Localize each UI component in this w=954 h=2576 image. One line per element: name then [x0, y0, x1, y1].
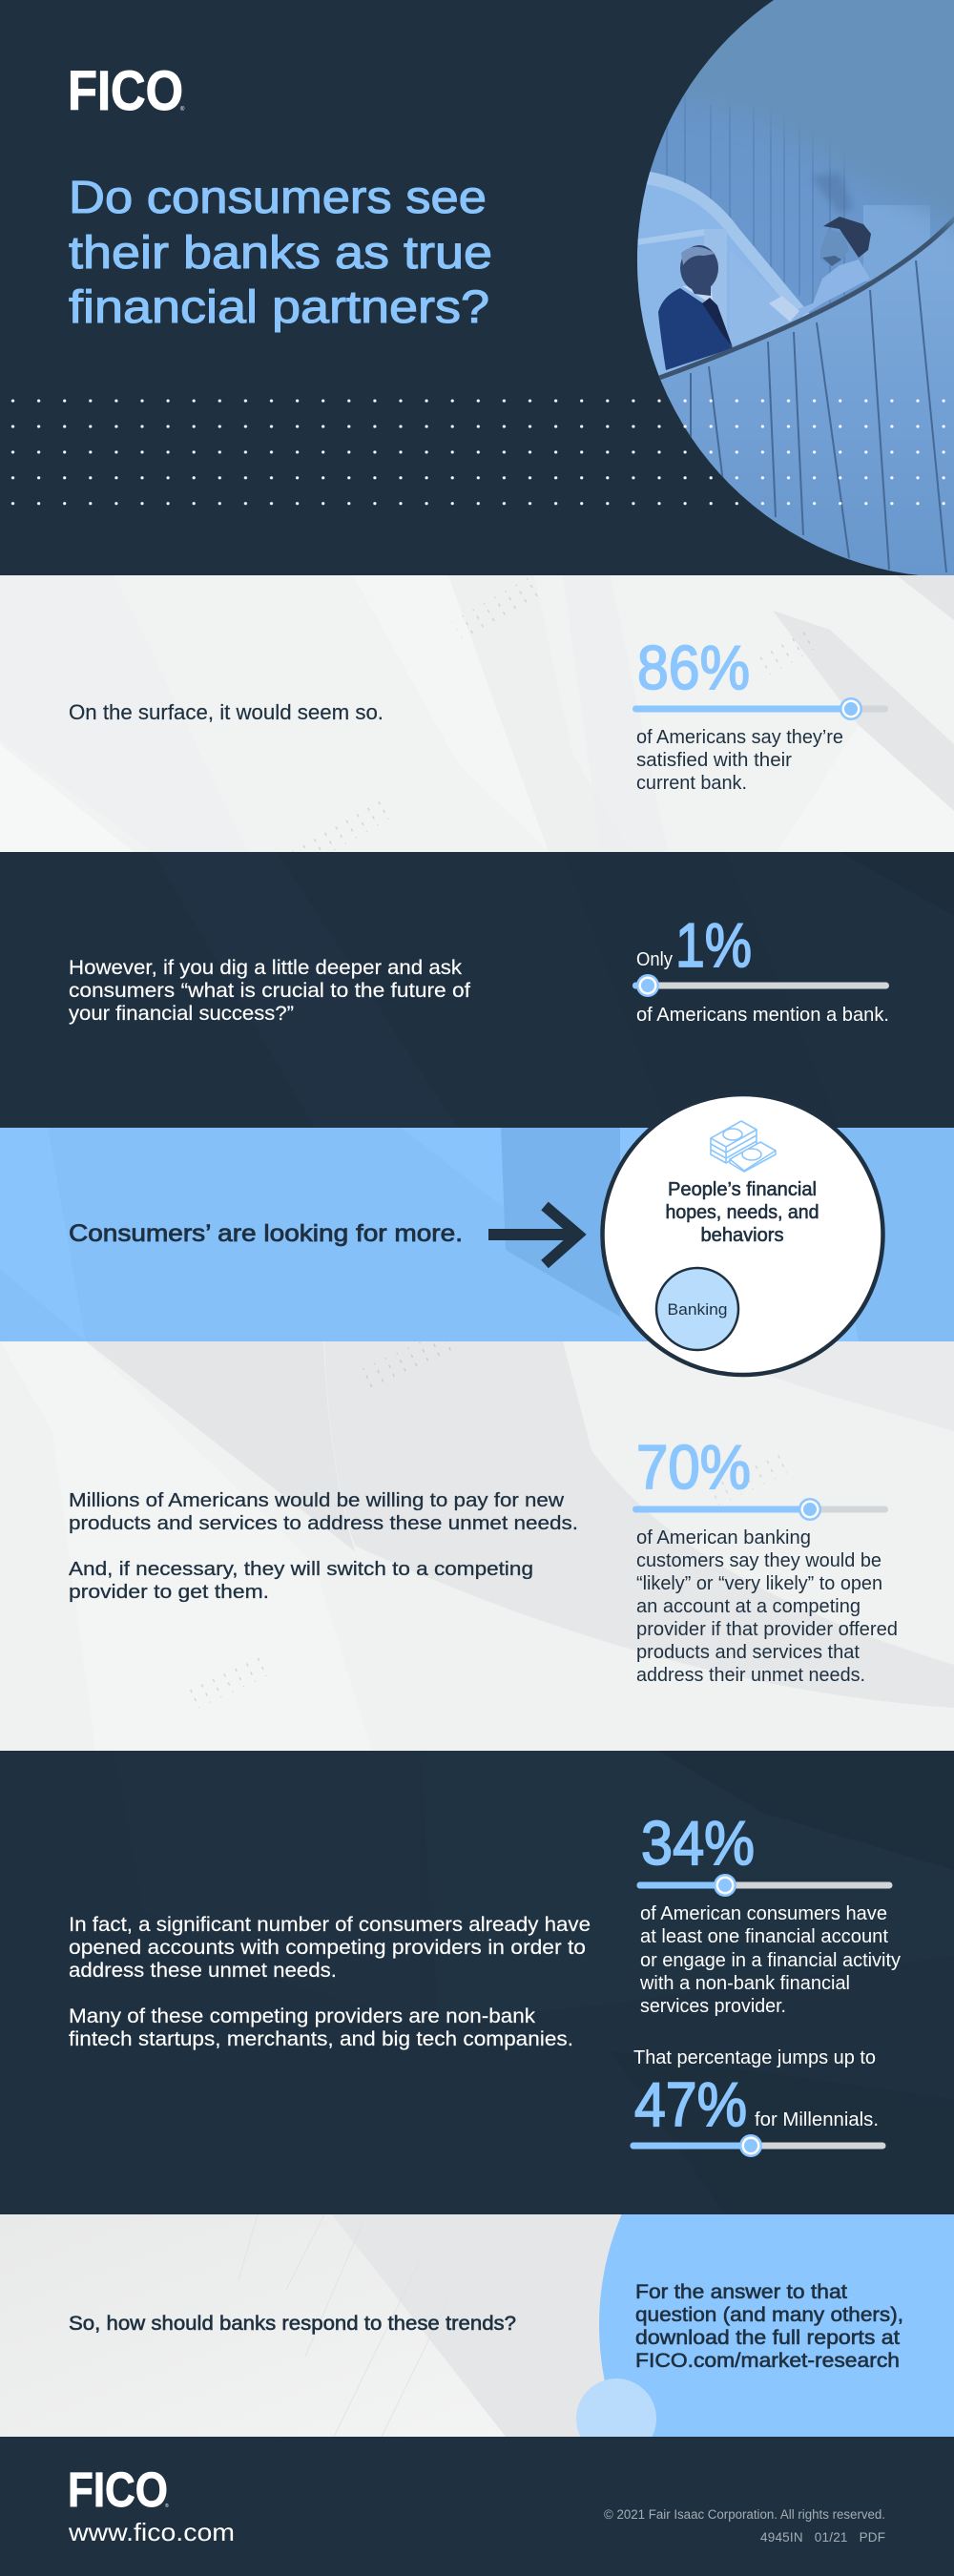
logo: FICO footer: ® — [165, 2503, 169, 2509]
panel: millions of Americans — [0, 1331, 954, 1751]
blue circle — [599, 2214, 954, 2437]
panel: header — [0, 0, 954, 592]
stat: 47%: for Millennials. — [755, 2109, 879, 2130]
text: dig a little deeper — [69, 957, 470, 1025]
stat: 47%: 47% — [634, 2069, 747, 2139]
small circle: banking: Banking — [668, 1300, 727, 1319]
text: download the full reports: FICO.com/market-research — [635, 2350, 900, 2372]
text: download the full reports: For the answer to that — [635, 2281, 847, 2303]
panel: consumers looking for more — [0, 1128, 954, 1341]
stat: 34%: 34% — [641, 1808, 755, 1878]
person: man in blue blazer — [658, 245, 733, 370]
title — [69, 173, 492, 333]
title: their banks as true — [69, 228, 492, 279]
panel: on the surface — [0, 574, 954, 869]
icon: stacks of money — [711, 1121, 776, 1172]
stat: 70%: an account at a competing — [636, 1596, 861, 1617]
text: how should banks respond: So, how should banks respond to these trends? — [69, 2312, 516, 2335]
stat: 47%: That percentage jumps up to — [633, 2047, 876, 2068]
text: dig a little deeper: consumers “what is crucial to the future of — [69, 980, 470, 1002]
text: millions of Americans — [69, 1489, 578, 1603]
staircase balustrade — [649, 215, 954, 592]
text: millions of Americans: And, if necessary, they will switch to a competing — [69, 1558, 533, 1580]
stat: 86%: 86% — [637, 633, 750, 702]
panel: dig a little deeper — [69, 923, 889, 1025]
stat: 47% — [630, 2047, 885, 2157]
photo top fade — [678, 0, 954, 235]
dot pattern — [0, 387, 954, 516]
stat: 34%: with a non-bank financial — [639, 1973, 850, 1994]
text: hopes, needs and behaviors — [666, 1178, 819, 1246]
stat: 34% — [637, 1808, 901, 2017]
text: dig a little deeper: your financial success?” — [69, 1003, 294, 1025]
small pale circle — [576, 2379, 656, 2437]
stat: 34%: of American consumers have — [640, 1903, 887, 1924]
stat: 1%: 1% — [675, 910, 752, 980]
panel: competing providers — [69, 1820, 901, 2157]
text: millions of Americans: products and services to address these unmet needs. — [69, 1512, 578, 1534]
stat: 70%: customers say they would be — [636, 1550, 881, 1571]
text: hopes, needs and behaviors: People’s financial — [668, 1178, 817, 1200]
text: document code: 4945IN 01/21 PDF — [760, 2530, 885, 2545]
logo: FICO footer: FICO — [68, 2462, 168, 2517]
stat: 86% — [633, 633, 888, 794]
text: download the full reports: download the full reports at — [635, 2327, 900, 2349]
text: hopes, needs and behaviors: behaviors — [700, 1224, 784, 1246]
stat: 86%: satisfied with their — [636, 750, 792, 771]
title: Do consumers see — [69, 173, 487, 223]
panel: footer — [0, 2437, 954, 2576]
stat: 34%: services provider. — [640, 1996, 786, 2017]
stat: 1%: of Americans mention a bank. — [636, 1005, 889, 1026]
text: competing providers: opened accounts with competing providers in order to — [69, 1937, 586, 1959]
logo: FICO: FICO — [68, 60, 183, 122]
text: download the full reports: question (and many others), — [635, 2304, 903, 2326]
stat: 70%: address their unmet needs. — [636, 1665, 865, 1686]
text: competing providers: Many of these competing providers are non-bank — [69, 2005, 536, 2027]
venn: large circle with hopes, needs and behaviors — [603, 1094, 883, 1375]
stat: 34%: at least one financial account — [640, 1926, 888, 1947]
stat: 86%: current bank. — [636, 773, 747, 794]
text: dig a little deeper: However, if you dig a little deeper and ask — [69, 957, 463, 979]
text: competing providers: In fact, a significant number of consumers already have — [69, 1914, 591, 1936]
stat: 34%: or engage in a financial activity — [640, 1950, 901, 1971]
stat: 70% — [633, 1432, 898, 1686]
text: on the surface: On the surface, it would seem so. — [69, 700, 384, 724]
arrow — [488, 1206, 578, 1264]
text: competing providers: address these unmet needs. — [69, 1960, 337, 1982]
text: competing providers — [69, 1914, 591, 2050]
panel: call to action — [0, 2214, 954, 2437]
text: copyright: © 2021 Fair Isaac Corporation. All rights reserved. — [604, 2507, 885, 2522]
small circle: banking — [656, 1268, 738, 1350]
logo: FICO: ® — [180, 106, 185, 113]
text: hopes, needs and behaviors: hopes, needs, and — [666, 1201, 819, 1223]
text: consumers looking for more: Consumers’ are looking for more. — [69, 1220, 463, 1247]
stat: 70%: provider if that provider offered — [636, 1619, 898, 1640]
stat: 1% — [633, 910, 889, 1026]
person: man in light shirt — [769, 217, 871, 322]
text: millions of Americans: provider to get them. — [69, 1581, 269, 1603]
title: financial partners? — [69, 282, 489, 333]
stat: 70%: “likely” or “very likely” to open — [636, 1573, 882, 1594]
text: millions of Americans: Millions of Americans would be willing to pay for new — [69, 1489, 564, 1511]
stat: 70%: of American banking — [636, 1527, 811, 1548]
text: website: www.fico.com — [68, 2518, 235, 2546]
text: download the full reports — [635, 2281, 903, 2372]
text: competing providers: fintech startups, merchants, and big tech companies. — [69, 2028, 573, 2050]
stat: 86%: of Americans say they’re — [636, 727, 843, 748]
stat: 70%: 70% — [636, 1432, 751, 1502]
stat: 1%: Only — [636, 949, 673, 970]
photo: two men talking on a curved staircase — [637, 0, 954, 575]
stat: 70%: products and services that — [636, 1642, 860, 1663]
